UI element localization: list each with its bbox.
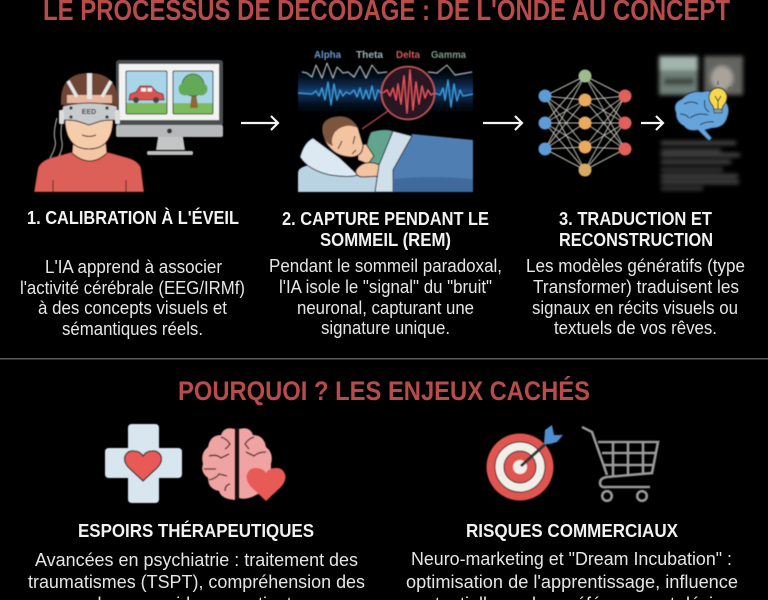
heading: step 2: SOMMEIL (REM): [320, 229, 451, 250]
panel: step 2 capture: [269, 49, 502, 338]
icon: monitor with car and tree: [116, 60, 223, 155]
text: step 1 description: sémantiques réels.: [62, 319, 203, 339]
text: risks description: Neuro-marketing et "Dream Incubation" :: [411, 549, 732, 569]
text: step 3 description: Les modèles génératifs (type: [526, 256, 745, 276]
icon: brain wave bands: Alpha: [314, 49, 341, 61]
text: risks description: [406, 549, 738, 600]
arrow: step 2 to 3: [483, 116, 522, 130]
image: blurred reconstructed pictures: [659, 56, 743, 95]
icon: target with dart: [486, 425, 563, 500]
icon: medical cross with heart: [105, 424, 182, 503]
icon: person with EEG headset: [34, 73, 144, 192]
icon: shopping cart: [582, 427, 658, 501]
icon: brain with heart: [202, 428, 286, 501]
text: hopes description: Avancées en psychiatrie : traitement des: [35, 550, 358, 570]
icon: brain wave bands: Theta: [356, 49, 383, 61]
text: step 2 description: [269, 256, 502, 338]
text: step 1 description: l'activité cérébrale (EEG/IRMf): [20, 278, 245, 298]
heading: step 3: RECONSTRUCTION: [559, 229, 713, 250]
heading: step 3: [559, 208, 713, 250]
text: risks description: optimisation de l'apprentissage, influence: [406, 572, 738, 592]
text: step 3 description: [526, 256, 745, 338]
icon: brain wave bands: [298, 49, 473, 129]
text: step 2 description: neuronal, capturant une: [297, 298, 474, 318]
heading: risks: RISQUES COMMERCIAUX: [466, 520, 679, 541]
panel: commercial risks: [406, 425, 738, 600]
image: blurred reconstructed text: [661, 141, 740, 190]
text: step 2 description: Pendant le sommeil paradoxal,: [269, 256, 502, 276]
icon: brain wave bands: Delta: [396, 49, 420, 61]
panel: step 1 calibration: [20, 60, 245, 339]
heading: hopes: ESPOIRS THÉRAPEUTIQUES: [78, 520, 314, 541]
icon: sleeping person in bed: [298, 116, 473, 192]
icon: person with EEG headset: EED: [82, 109, 96, 116]
text: step 3 description: textuels de vos rêves.: [554, 318, 717, 338]
icon: brain wave bands: Gamma: [431, 49, 466, 61]
text: hopes description: [28, 550, 365, 600]
text: step 2 description: signature unique.: [321, 318, 450, 338]
text: step 3 description: Transformer) traduisent les: [533, 277, 739, 297]
text: step 1 description: L'IA apprend à associer: [45, 257, 222, 277]
arrow: network to output: [641, 116, 663, 130]
text: hopes description: traumatismes (TSPT), compréhension des: [28, 572, 365, 592]
panel: step 3 translation: [526, 56, 745, 338]
arrow: step 1 to 2: [241, 116, 278, 130]
panel: therapeutic hopes: [28, 424, 365, 600]
icon: brain with light bulb: [675, 81, 731, 141]
heading: step 2: 2. CAPTURE PENDANT LE: [282, 208, 489, 229]
heading: why: POURQUOI ? LES ENJEUX CACHÉS: [178, 376, 590, 406]
heading: step 1: 1. CALIBRATION À L'ÉVEIL: [27, 207, 239, 228]
heading: step 3: 3. TRADUCTION ET: [559, 208, 713, 229]
text: step 1 description: à des concepts visuels et: [38, 298, 227, 318]
text: step 3 description: signaux en récits visuels ou: [532, 298, 738, 318]
heading: step 2: [282, 208, 489, 250]
icon: neural network: [538, 70, 632, 176]
text: step 2 description: l'IA isole le "signal" du "bruit": [279, 277, 492, 297]
text: step 1 description: [20, 257, 245, 339]
